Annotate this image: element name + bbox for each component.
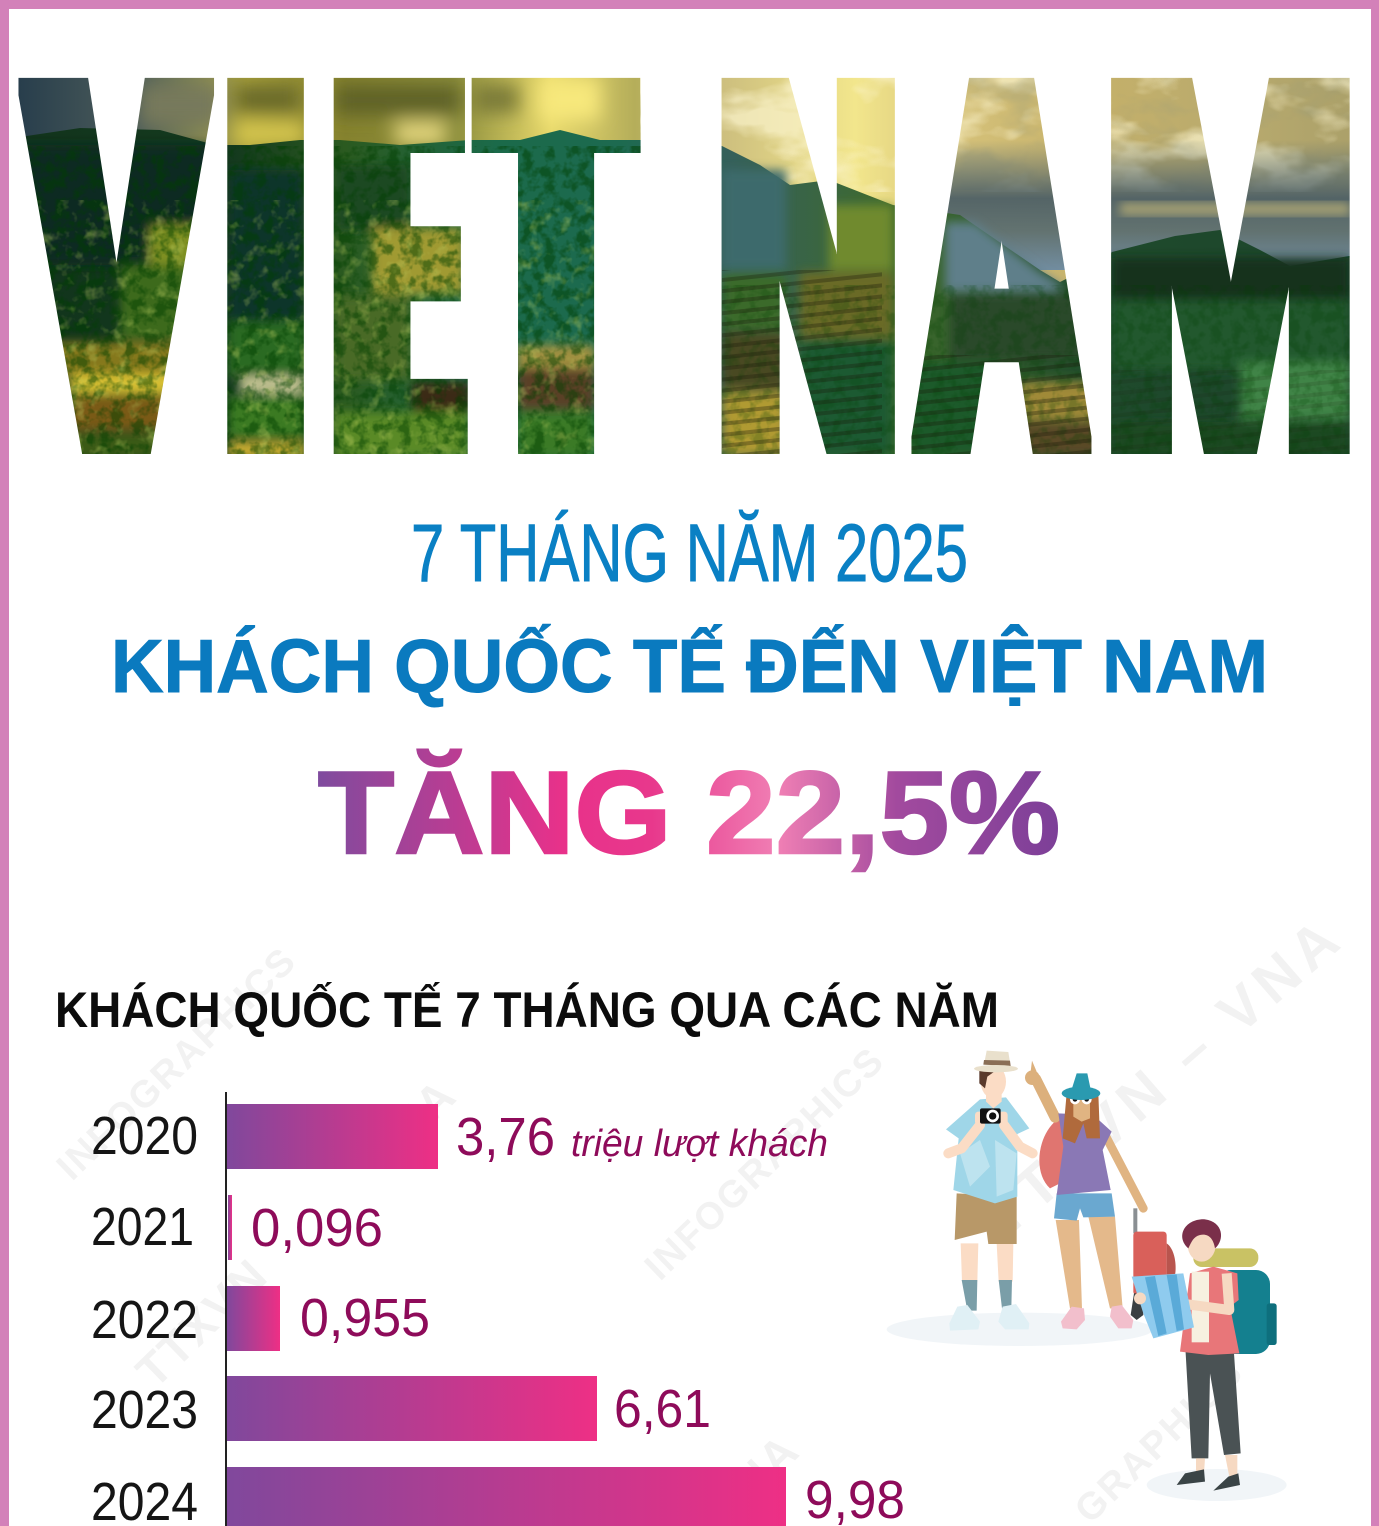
row 2020: 2020 (91, 1106, 198, 1166)
photo: mountains (0, 128, 1379, 460)
illustration: tourists (887, 1051, 1287, 1501)
row 2023 (91, 1376, 711, 1441)
row 2024 (91, 1467, 905, 1526)
row 2023: 6,61 (614, 1379, 711, 1439)
row 2020 (91, 1104, 828, 1169)
row 2020: 3,76 (456, 1107, 555, 1167)
bar chart (91, 1092, 905, 1526)
watermarks: TTXVN – VNA (971, 903, 1356, 1250)
row 2023: 2023 (91, 1380, 198, 1440)
row 2021: 2021 (91, 1197, 194, 1257)
watermarks: INFOGRAPHICS (49, 939, 305, 1188)
subtitle: period: 7 THÁNG NĂM 2025 (411, 508, 968, 599)
row 2022 (91, 1286, 430, 1351)
chart axis (225, 1092, 227, 1526)
icon: woman with suitcase (1025, 1061, 1176, 1329)
row 2021: 0,096 (251, 1198, 383, 1258)
photo: sky (18, 78, 1350, 282)
watermarks: INFOGRAPHICS (637, 1039, 893, 1288)
ground shadows (887, 1313, 1287, 1501)
watermarks: VNA (356, 1068, 466, 1177)
row 2020: triệu lượt khách (571, 1123, 828, 1165)
chart heading: KHÁCH QUỐC TẾ 7 THÁNG QUA CÁC NĂM (55, 981, 999, 1038)
row 2021 (91, 1195, 383, 1260)
watermarks: TTXVN (126, 1248, 278, 1397)
icon: man with camera (946, 1051, 1033, 1331)
row 2022: 0,955 (300, 1288, 430, 1348)
watermarks (49, 903, 1356, 1526)
headline figure: TĂNG 22,5% (318, 747, 1060, 878)
row 2022: 2022 (91, 1290, 198, 1350)
title: VIET NAM photo-filled letters (0, 70, 1379, 460)
icon: boy with map and backpack (1132, 1219, 1277, 1491)
heading: international visitors: KHÁCH QUỐC TẾ ĐẾN VIỆT NAM (111, 624, 1268, 708)
